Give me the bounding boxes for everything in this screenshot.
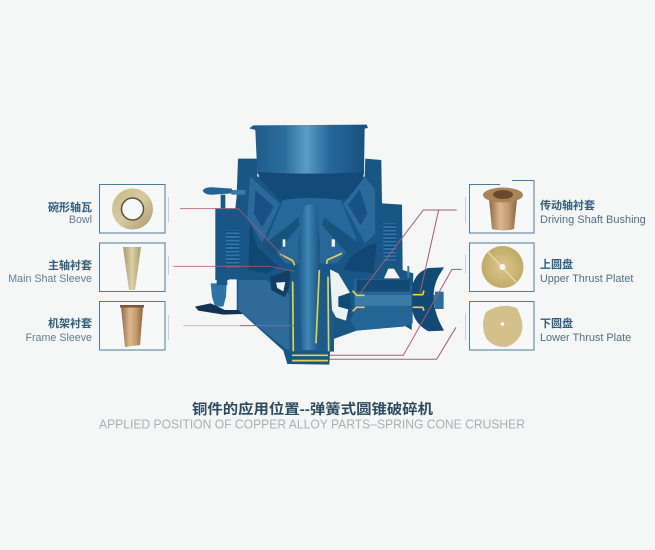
hopper bbox=[249, 125, 368, 201]
label: bowl bbox=[48, 200, 92, 226]
label: driving shaft bushing bbox=[540, 198, 646, 226]
crushing chamber, left and right bbox=[247, 177, 377, 273]
title: 铜件的应用位置--弹簧式圆锥破碎机 bbox=[192, 401, 433, 417]
label: bowl: 碗形轴瓦 bbox=[48, 200, 92, 214]
label: upper thrust plate bbox=[540, 257, 633, 285]
copper alloy parts bbox=[280, 253, 424, 361]
label: bowl: Bowl bbox=[69, 214, 92, 226]
part box: bowl bbox=[100, 184, 165, 233]
hand lever bbox=[203, 187, 245, 210]
crusher cross-section diagram bbox=[173, 125, 462, 365]
label: frame sleeve: 机架衬套 bbox=[48, 316, 92, 330]
icon: bowl bearing ring bbox=[112, 188, 153, 230]
icon: upper disc bbox=[482, 246, 524, 288]
part box: frame sleeve bbox=[100, 302, 165, 350]
icon: copper sleeve bbox=[120, 305, 144, 347]
drive shaft bbox=[355, 295, 443, 306]
left spring bbox=[226, 230, 239, 267]
label: lower thrust plate: Lower Thrust Plate bbox=[540, 332, 631, 344]
side ticks bbox=[168, 197, 466, 340]
label: frame sleeve bbox=[25, 316, 92, 344]
label: driving shaft bushing: Driving Shaft Bushing bbox=[540, 214, 646, 226]
left valve and foot bbox=[195, 277, 243, 315]
part box: main shaft sleeve bbox=[100, 243, 165, 292]
part box: lower thrust plate bbox=[470, 302, 534, 350]
label: main shaft sleeve: Main Shat Sleeve bbox=[8, 273, 92, 285]
main shaft bbox=[298, 204, 320, 350]
label: main shaft sleeve bbox=[8, 258, 92, 285]
leader lines bbox=[173, 209, 462, 359]
label: upper thrust plate: 上圆盘 bbox=[540, 257, 573, 271]
subtitle: APPLIED POSITION OF COPPER ALLOY PARTS–SPRING CONE CRUSHER bbox=[99, 416, 525, 432]
icon: tapered sleeve bbox=[123, 247, 141, 290]
label: lower thrust plate bbox=[540, 316, 631, 344]
machine housing silhouette bbox=[215, 159, 413, 365]
icon: flanged bushing bbox=[483, 188, 523, 230]
right spring bbox=[383, 223, 409, 278]
part box: upper thrust plate bbox=[470, 243, 534, 292]
pulley bbox=[412, 267, 444, 331]
title bbox=[99, 401, 525, 432]
icon: lower disc bbox=[483, 306, 522, 347]
label: lower thrust plate: 下圆盘 bbox=[540, 316, 573, 330]
label: main shaft sleeve: 主轴衬套 bbox=[48, 258, 92, 272]
part box: driving shaft bushing bbox=[470, 180, 534, 233]
label: frame sleeve: Frame Sleeve bbox=[25, 332, 92, 344]
label: driving shaft bushing: 传动轴衬套 bbox=[540, 198, 595, 212]
label: upper thrust plate: Upper Thrust Platet bbox=[540, 273, 633, 285]
lower frame bbox=[270, 269, 413, 352]
